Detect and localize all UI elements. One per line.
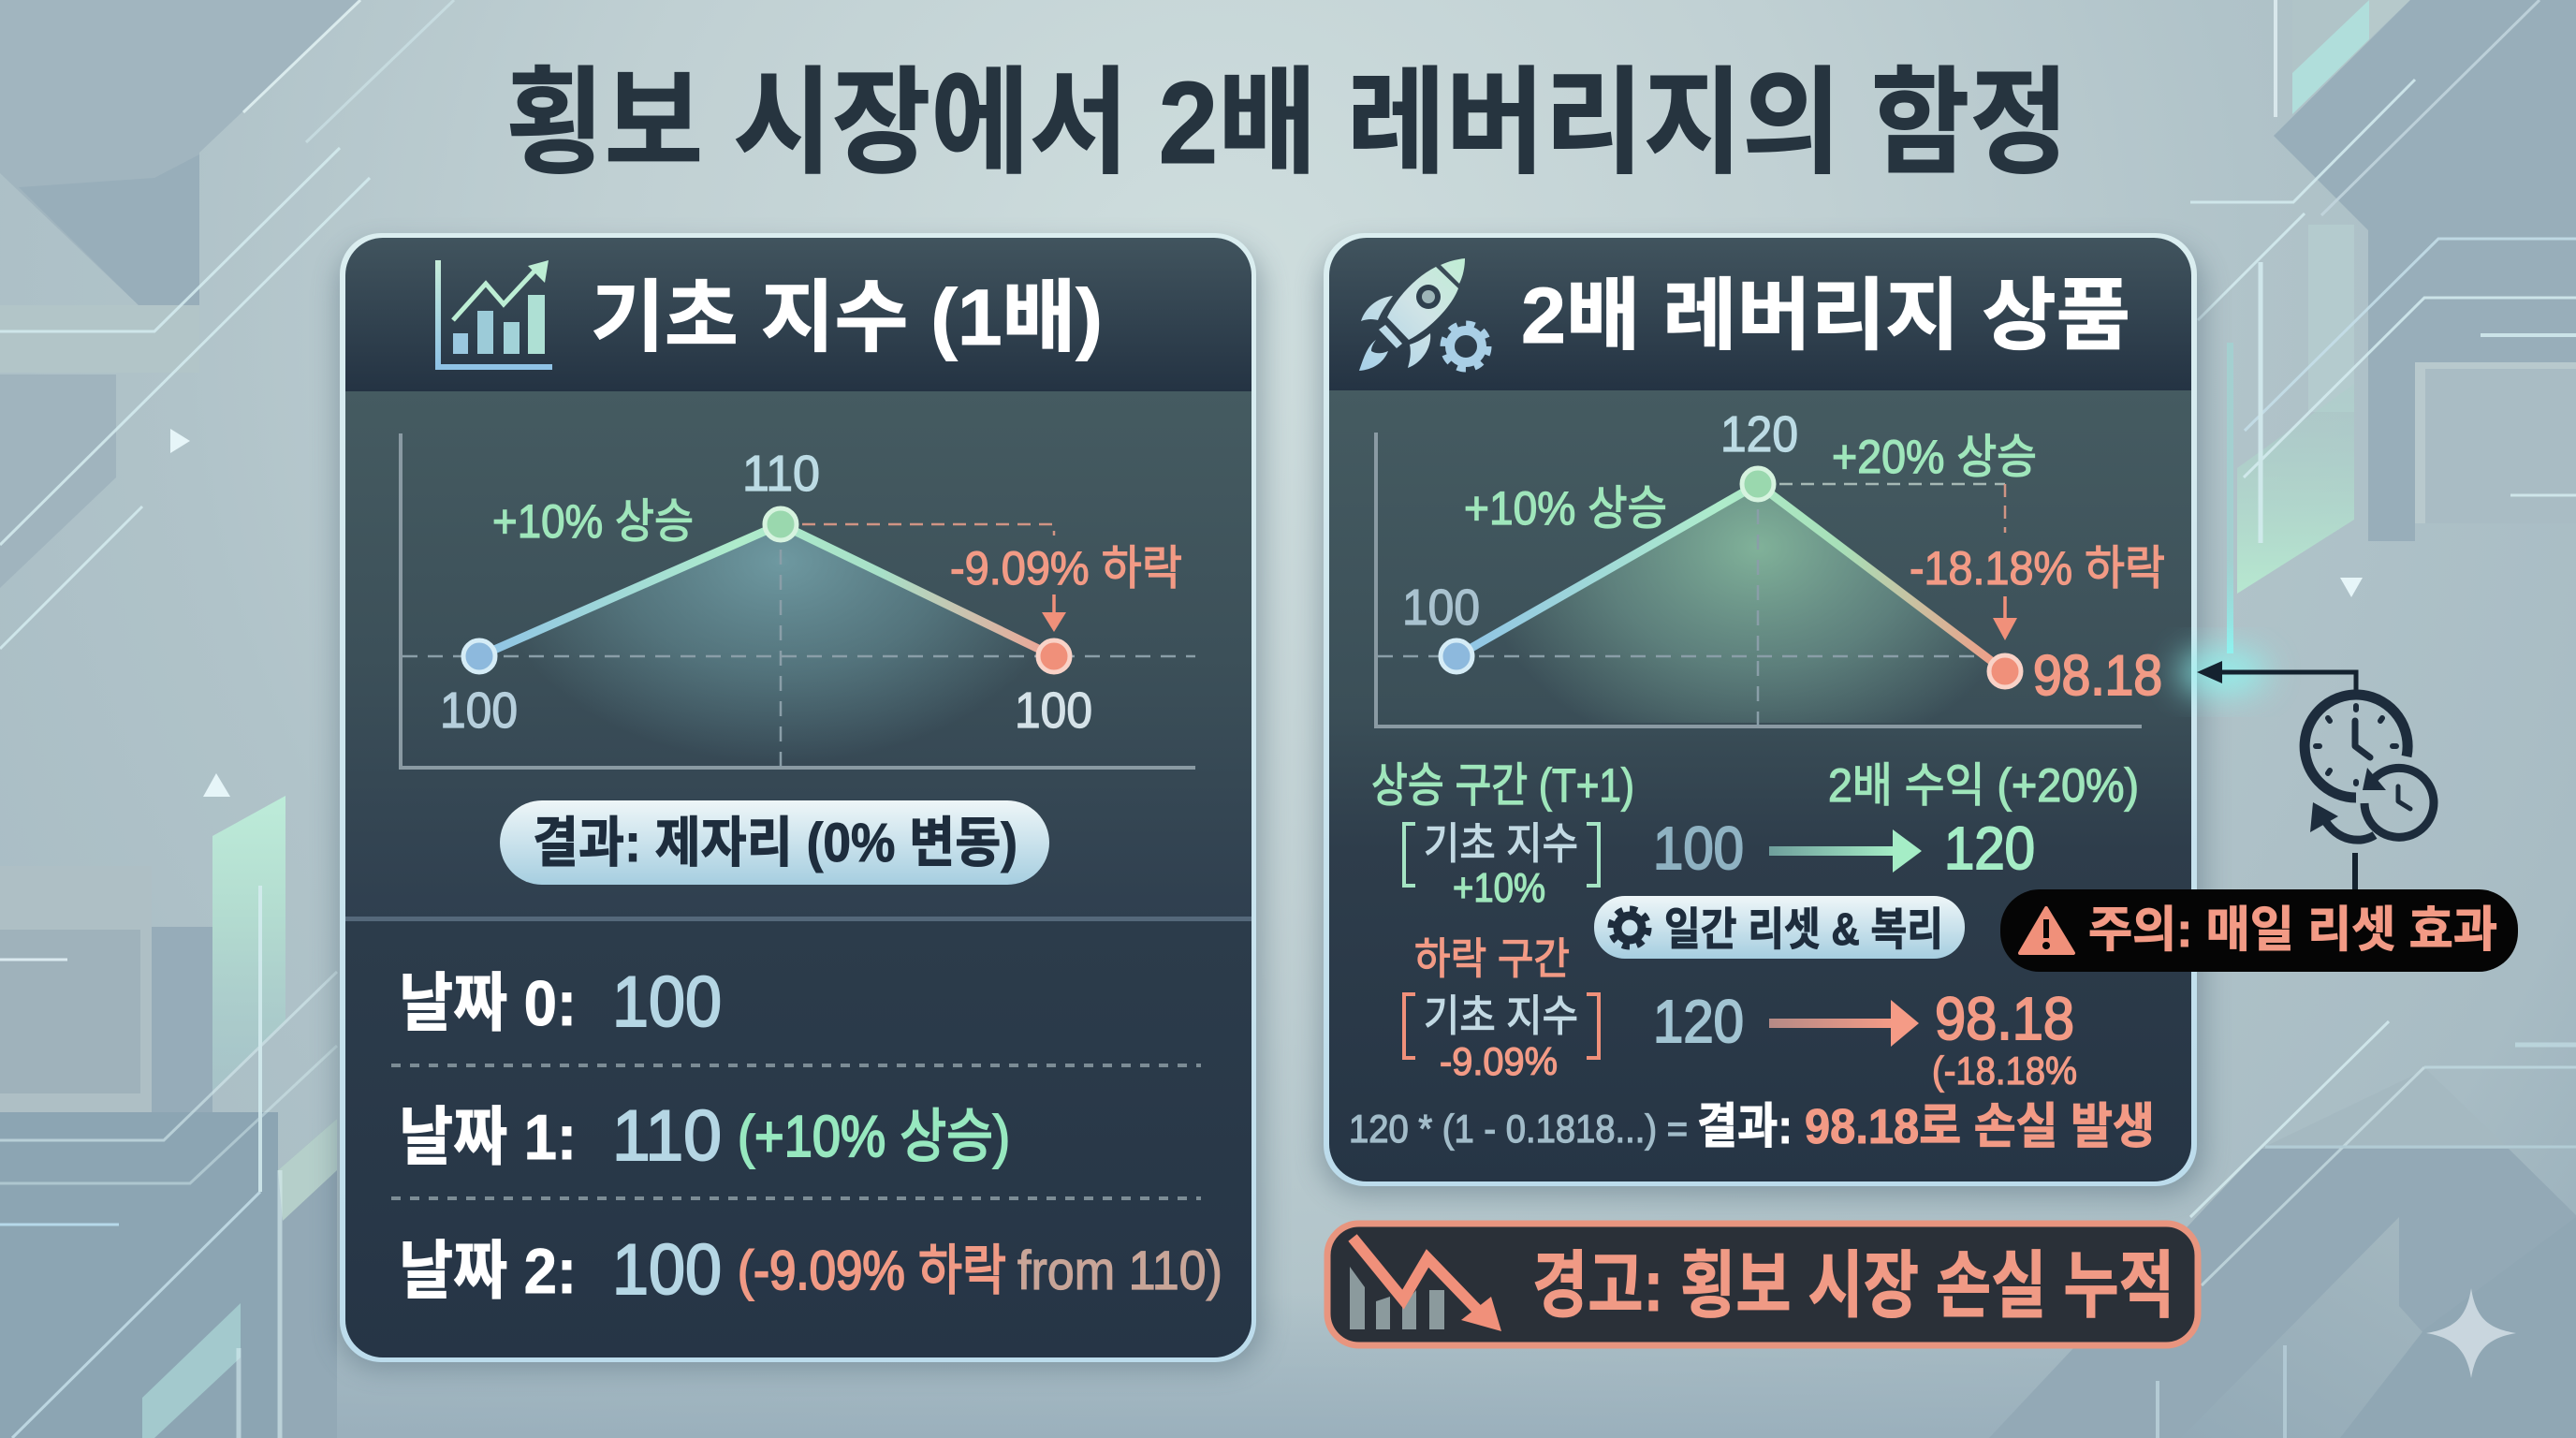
calc: down segment: (-18.18% — [1932, 1049, 2077, 1093]
daily reset pill — [1594, 896, 1965, 959]
panel: base index 1x — [337, 233, 1264, 1369]
calc: down segment — [1404, 934, 2077, 1093]
calc: up segment: 2배 수익 (+20%) — [1828, 759, 2139, 812]
callout: reset effect caution — [2000, 889, 2518, 972]
calc: down segment: 하락 구간 — [1414, 934, 1570, 983]
row: day 2 — [399, 1230, 1222, 1310]
calc: up segment: +10% — [1453, 865, 1545, 911]
row: day 0: 100 — [612, 962, 722, 1042]
result pill: 결과: 제자리 (0% 변동) — [533, 813, 1017, 873]
line chart: 2x leveraged: +10% 상승 — [1464, 482, 1667, 535]
line chart: base index: +10% 상승 — [492, 495, 694, 548]
heading: 2x leveraged product: 2배 레버리지 상품 — [1521, 271, 2130, 360]
line chart: 2x leveraged: -18.18% 하락 — [1910, 542, 2165, 594]
row: day 2: from 110) — [1017, 1240, 1222, 1301]
row: day 0 — [399, 962, 722, 1042]
line chart: 2x leveraged — [1376, 406, 2165, 726]
line chart: 2x leveraged: 98.18 — [2033, 644, 2162, 707]
icon: rising bar chart — [438, 260, 552, 367]
icon: rocket and gear — [1359, 258, 1488, 371]
line chart: 2x leveraged: 100 — [1402, 580, 1480, 636]
heading: 2x leveraged product — [1359, 258, 2130, 371]
arrow: up result — [1769, 829, 1922, 873]
calc: up segment: 기초 지수 — [1424, 819, 1578, 868]
icon: warning triangle — [2020, 908, 2073, 953]
calc: up segment: 100 — [1653, 814, 1744, 882]
icon: falling chart — [1350, 1238, 1501, 1331]
calc: up segment: 상승 구간 (T+1) — [1371, 759, 1634, 812]
heading: base index — [438, 260, 1103, 367]
row: day 0: 날짜 0: — [399, 968, 577, 1039]
line chart: base index: 110 — [742, 446, 820, 502]
row: day 1: 110 — [612, 1096, 722, 1176]
warning banner: 경고: 횡보 시장 손실 누적 — [1532, 1244, 2174, 1327]
icon: sparkle star — [2426, 1288, 2516, 1378]
icon: gear — [1611, 909, 1648, 946]
heading: base index: 기초 지수 (1배) — [591, 273, 1103, 361]
calc: down segment: 98.18 — [1935, 985, 2074, 1052]
calc: down segment: 기초 지수 — [1424, 991, 1578, 1040]
line chart: 2x leveraged: +20% 상승 — [1832, 431, 2037, 483]
calc: up segment: 120 — [1944, 814, 2035, 882]
callout: daily reset link — [2178, 343, 2434, 892]
panel: 2x leveraged product — [1320, 233, 2204, 1196]
line chart: base index — [401, 433, 1195, 768]
line chart: base index: 100 — [1015, 682, 1092, 739]
daily reset pill: 일간 리셋 & 복리 — [1664, 905, 1943, 955]
line chart: base index: -9.09% 하락 — [950, 542, 1182, 594]
formula and result line: 120 * (1 - 0.1818...) = — [1349, 1107, 1688, 1151]
formula and result line — [1349, 1100, 2155, 1154]
callout: reset effect caution: 주의: 매일 리셋 효과 — [2088, 903, 2497, 958]
calc: up segment — [1371, 759, 2139, 911]
title: 횡보 시장에서 2배 레버리지의 함정 — [505, 59, 2069, 188]
result pill — [500, 800, 1049, 885]
row: day 1 — [399, 1096, 1010, 1176]
formula and result line: 결과: — [1697, 1100, 1793, 1154]
arrow: down to end point — [1993, 596, 2017, 640]
line chart: 2x leveraged: 120 — [1720, 406, 1798, 462]
arrow: clock to end value — [2197, 661, 2356, 690]
warning banner — [1327, 1224, 2198, 1345]
cyan glow — [2178, 343, 2268, 695]
arrow: down to end point — [1042, 594, 1066, 632]
row: day 2: 날짜 2: — [399, 1236, 577, 1307]
row: day 2: 100 — [612, 1230, 722, 1310]
row: day 2: (-9.09% 하락 — [738, 1240, 1006, 1301]
row: day 1: (+10% 상승) — [738, 1105, 1010, 1169]
formula and result line: 98.18로 손실 발생 — [1805, 1100, 2155, 1154]
line chart: base index: 100 — [440, 682, 518, 739]
icon: clock reset — [2305, 695, 2434, 840]
calc: down segment: 120 — [1653, 988, 1744, 1055]
calc: down segment: -9.09% — [1440, 1039, 1558, 1083]
row: day 1: 날짜 1: — [399, 1102, 577, 1173]
arrow: down result — [1769, 1000, 1919, 1047]
